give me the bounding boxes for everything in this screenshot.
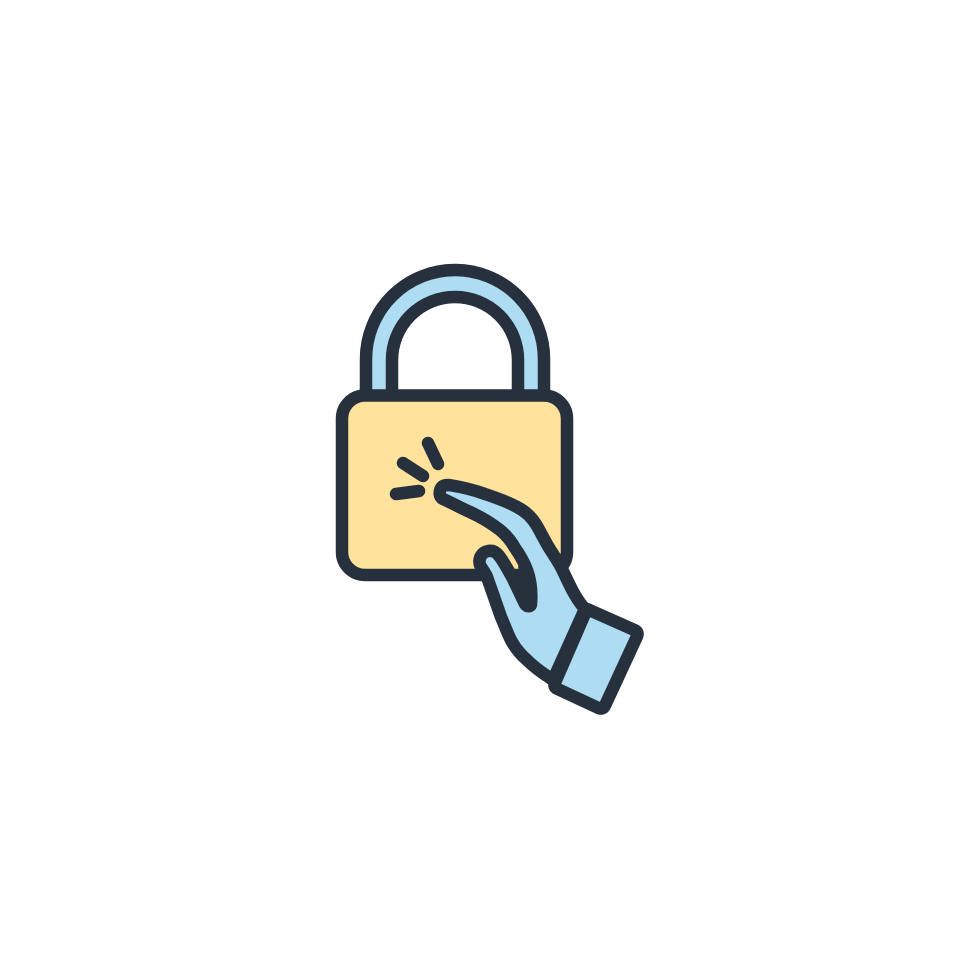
dark crease between finger and thumb (518, 566, 532, 604)
shirt cuff (554, 609, 638, 709)
tap spark marks (396, 443, 438, 494)
hand (440, 485, 585, 680)
padlock body (342, 396, 567, 575)
padlock shackle (366, 270, 544, 396)
